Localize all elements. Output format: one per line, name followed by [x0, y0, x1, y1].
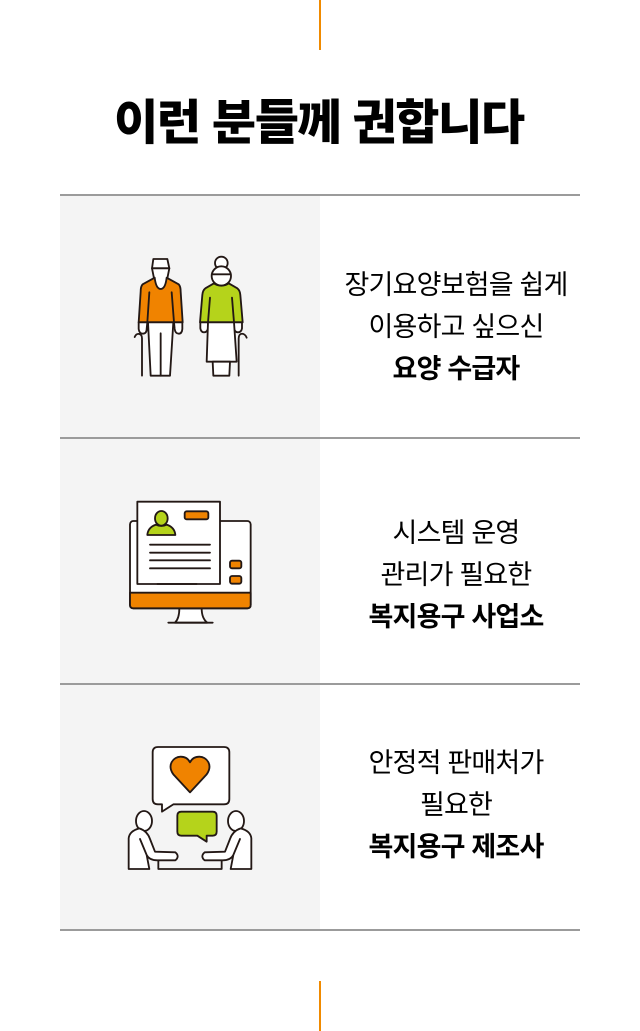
text: system operators — [368, 518, 544, 632]
bottom accent line — [319, 981, 321, 1031]
panel: care recipients — [60, 196, 568, 437]
text: system operators: 복지용구 사업소 — [368, 602, 543, 632]
panel: system operators — [60, 439, 544, 683]
title: 이런 분들께 권합니다 — [114, 97, 524, 150]
icon: elderly couple — [134, 256, 248, 377]
text: system operators: 시스템 운영 — [393, 518, 519, 548]
text: care recipients — [344, 270, 568, 384]
text: manufacturers — [368, 748, 544, 862]
text: manufacturers: 필요한 — [420, 790, 492, 820]
panel: manufacturers — [60, 685, 544, 929]
top accent line — [319, 0, 321, 50]
text: care recipients: 장기요양보험을 쉽게 — [344, 270, 568, 300]
text: care recipients: 요양 수급자 — [393, 354, 519, 384]
text: manufacturers: 안정적 판매처가 — [368, 748, 543, 778]
icon: monitor and document — [129, 500, 252, 624]
text: system operators: 관리가 필요한 — [381, 560, 531, 590]
text: manufacturers: 복지용구 제조사 — [368, 832, 543, 862]
text: care recipients: 이용하고 싶으신 — [368, 312, 543, 342]
icon: consultation — [128, 746, 252, 870]
